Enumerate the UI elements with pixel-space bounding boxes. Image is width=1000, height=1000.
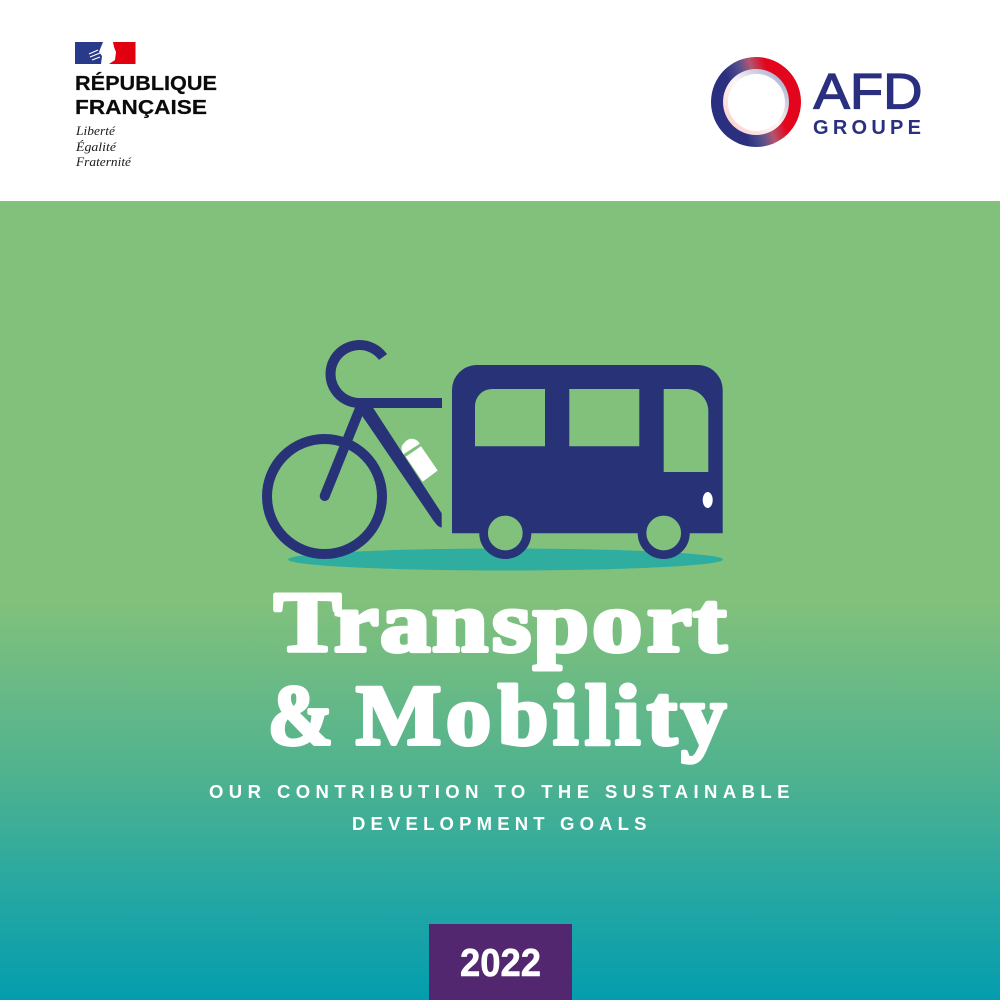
motto: Égalité	[75, 139, 117, 154]
year badge: 2022	[460, 942, 541, 985]
bus front wheel	[642, 511, 685, 555]
ground shadow	[288, 548, 723, 570]
icon: Marianne flag	[75, 42, 136, 64]
subtitle	[209, 781, 790, 834]
icon: water bottle	[402, 439, 438, 482]
logo: République Française	[75, 42, 217, 169]
title: Transport	[274, 576, 727, 670]
illustration: bicycle and bus	[267, 345, 723, 570]
wordmark: AFD: AFD	[814, 64, 922, 120]
white header background	[0, 0, 1000, 201]
title: &	[268, 667, 333, 763]
wordmark line: Française: FRANÇAISE	[75, 96, 207, 119]
title: Mobility	[356, 668, 726, 764]
icon: bicycle	[267, 345, 442, 554]
subtitle: DEVELOPMENT GOALS	[352, 813, 646, 834]
motto	[75, 123, 132, 169]
motto: Fraternité	[75, 154, 132, 169]
subtitle: OUR CONTRIBUTION TO THE SUSTAINABLE	[209, 781, 790, 802]
bus rear wheel	[484, 511, 527, 555]
motto: Liberté	[75, 123, 116, 138]
logo: AFD Groupe	[711, 57, 922, 147]
wordmark: Groupe: GROUPE	[813, 117, 921, 139]
wordmark line: République: RÉPUBLIQUE	[75, 72, 217, 95]
bus headlight	[703, 492, 713, 508]
year badge	[429, 924, 572, 1000]
icon: AFD ring	[711, 57, 801, 147]
green to teal gradient panel	[0, 201, 1000, 1000]
icon: bus	[452, 365, 723, 555]
title	[268, 576, 727, 764]
